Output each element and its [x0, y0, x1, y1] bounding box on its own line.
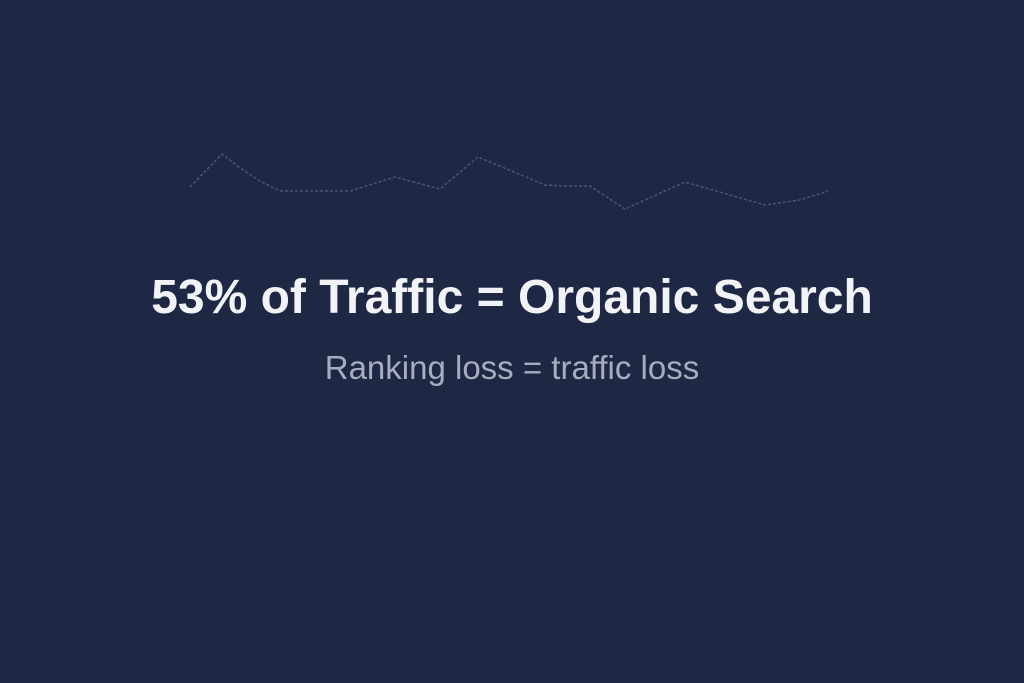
title: 53% of Traffic = Organic Search	[151, 271, 873, 324]
subtitle: Ranking loss = traffic loss	[325, 349, 699, 386]
